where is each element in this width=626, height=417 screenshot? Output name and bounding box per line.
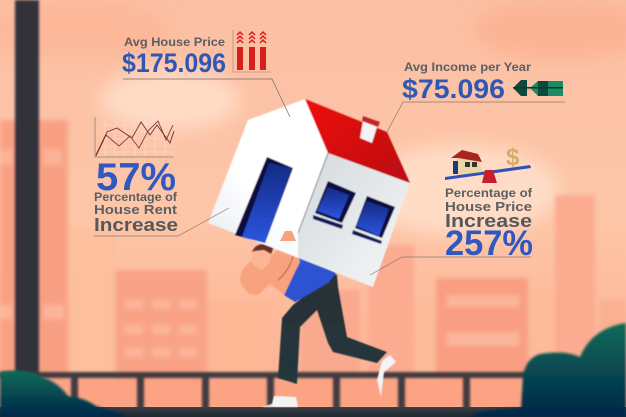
roof xyxy=(305,99,410,183)
value: house price: $175.096 xyxy=(122,48,226,78)
house xyxy=(208,99,410,287)
blurred city buildings xyxy=(0,120,626,380)
ground xyxy=(0,407,626,417)
panel: avg house price xyxy=(122,30,290,117)
leader line xyxy=(387,102,565,132)
panel: house rent increase xyxy=(94,117,229,236)
text: increase: Increase xyxy=(445,211,532,231)
arm and shoulder xyxy=(240,232,300,295)
pillar xyxy=(15,0,39,378)
icon: money stacks xyxy=(513,80,563,96)
text: percentage of: Percentage of xyxy=(94,192,177,204)
panel: avg income per year xyxy=(387,62,565,132)
door xyxy=(235,157,293,243)
front foot shoe xyxy=(262,396,298,407)
front wall xyxy=(208,99,373,287)
icon: seesaw house and dollar xyxy=(445,144,531,183)
panel: house price increase xyxy=(370,144,533,275)
text: increase: Increase xyxy=(94,214,178,235)
heading: avg income: Avg Income per Year xyxy=(404,62,532,74)
text: house rent: House Rent xyxy=(94,202,178,217)
lower rail background xyxy=(0,378,526,407)
leader line xyxy=(370,257,531,275)
face xyxy=(251,249,271,270)
hair xyxy=(252,244,273,254)
heading: avg house price: Avg House Price xyxy=(124,35,225,49)
text: house price: House Price xyxy=(445,199,532,214)
icon: rising bars xyxy=(233,30,271,72)
hand xyxy=(280,231,296,241)
value: 57%: 57% xyxy=(96,156,176,199)
shirt xyxy=(284,254,336,302)
bushes xyxy=(0,323,626,417)
value: income: $75.096 xyxy=(402,74,505,104)
clouds xyxy=(0,0,626,235)
chimney xyxy=(360,116,380,143)
pants xyxy=(278,273,387,384)
value: 257%: 257% xyxy=(445,224,533,263)
leader line xyxy=(94,208,229,236)
line chart xyxy=(95,117,174,157)
leader line xyxy=(123,79,290,117)
person carrying house xyxy=(240,232,396,407)
arm crease xyxy=(278,253,294,280)
railing xyxy=(0,372,526,417)
icon: seesaw house and dollar: $ xyxy=(506,144,520,171)
corner line xyxy=(298,153,328,233)
text: percentage of: Percentage of xyxy=(445,188,532,200)
window left xyxy=(313,181,356,229)
back foot shoe xyxy=(377,355,396,397)
window right xyxy=(352,196,395,244)
side wall xyxy=(298,153,410,287)
